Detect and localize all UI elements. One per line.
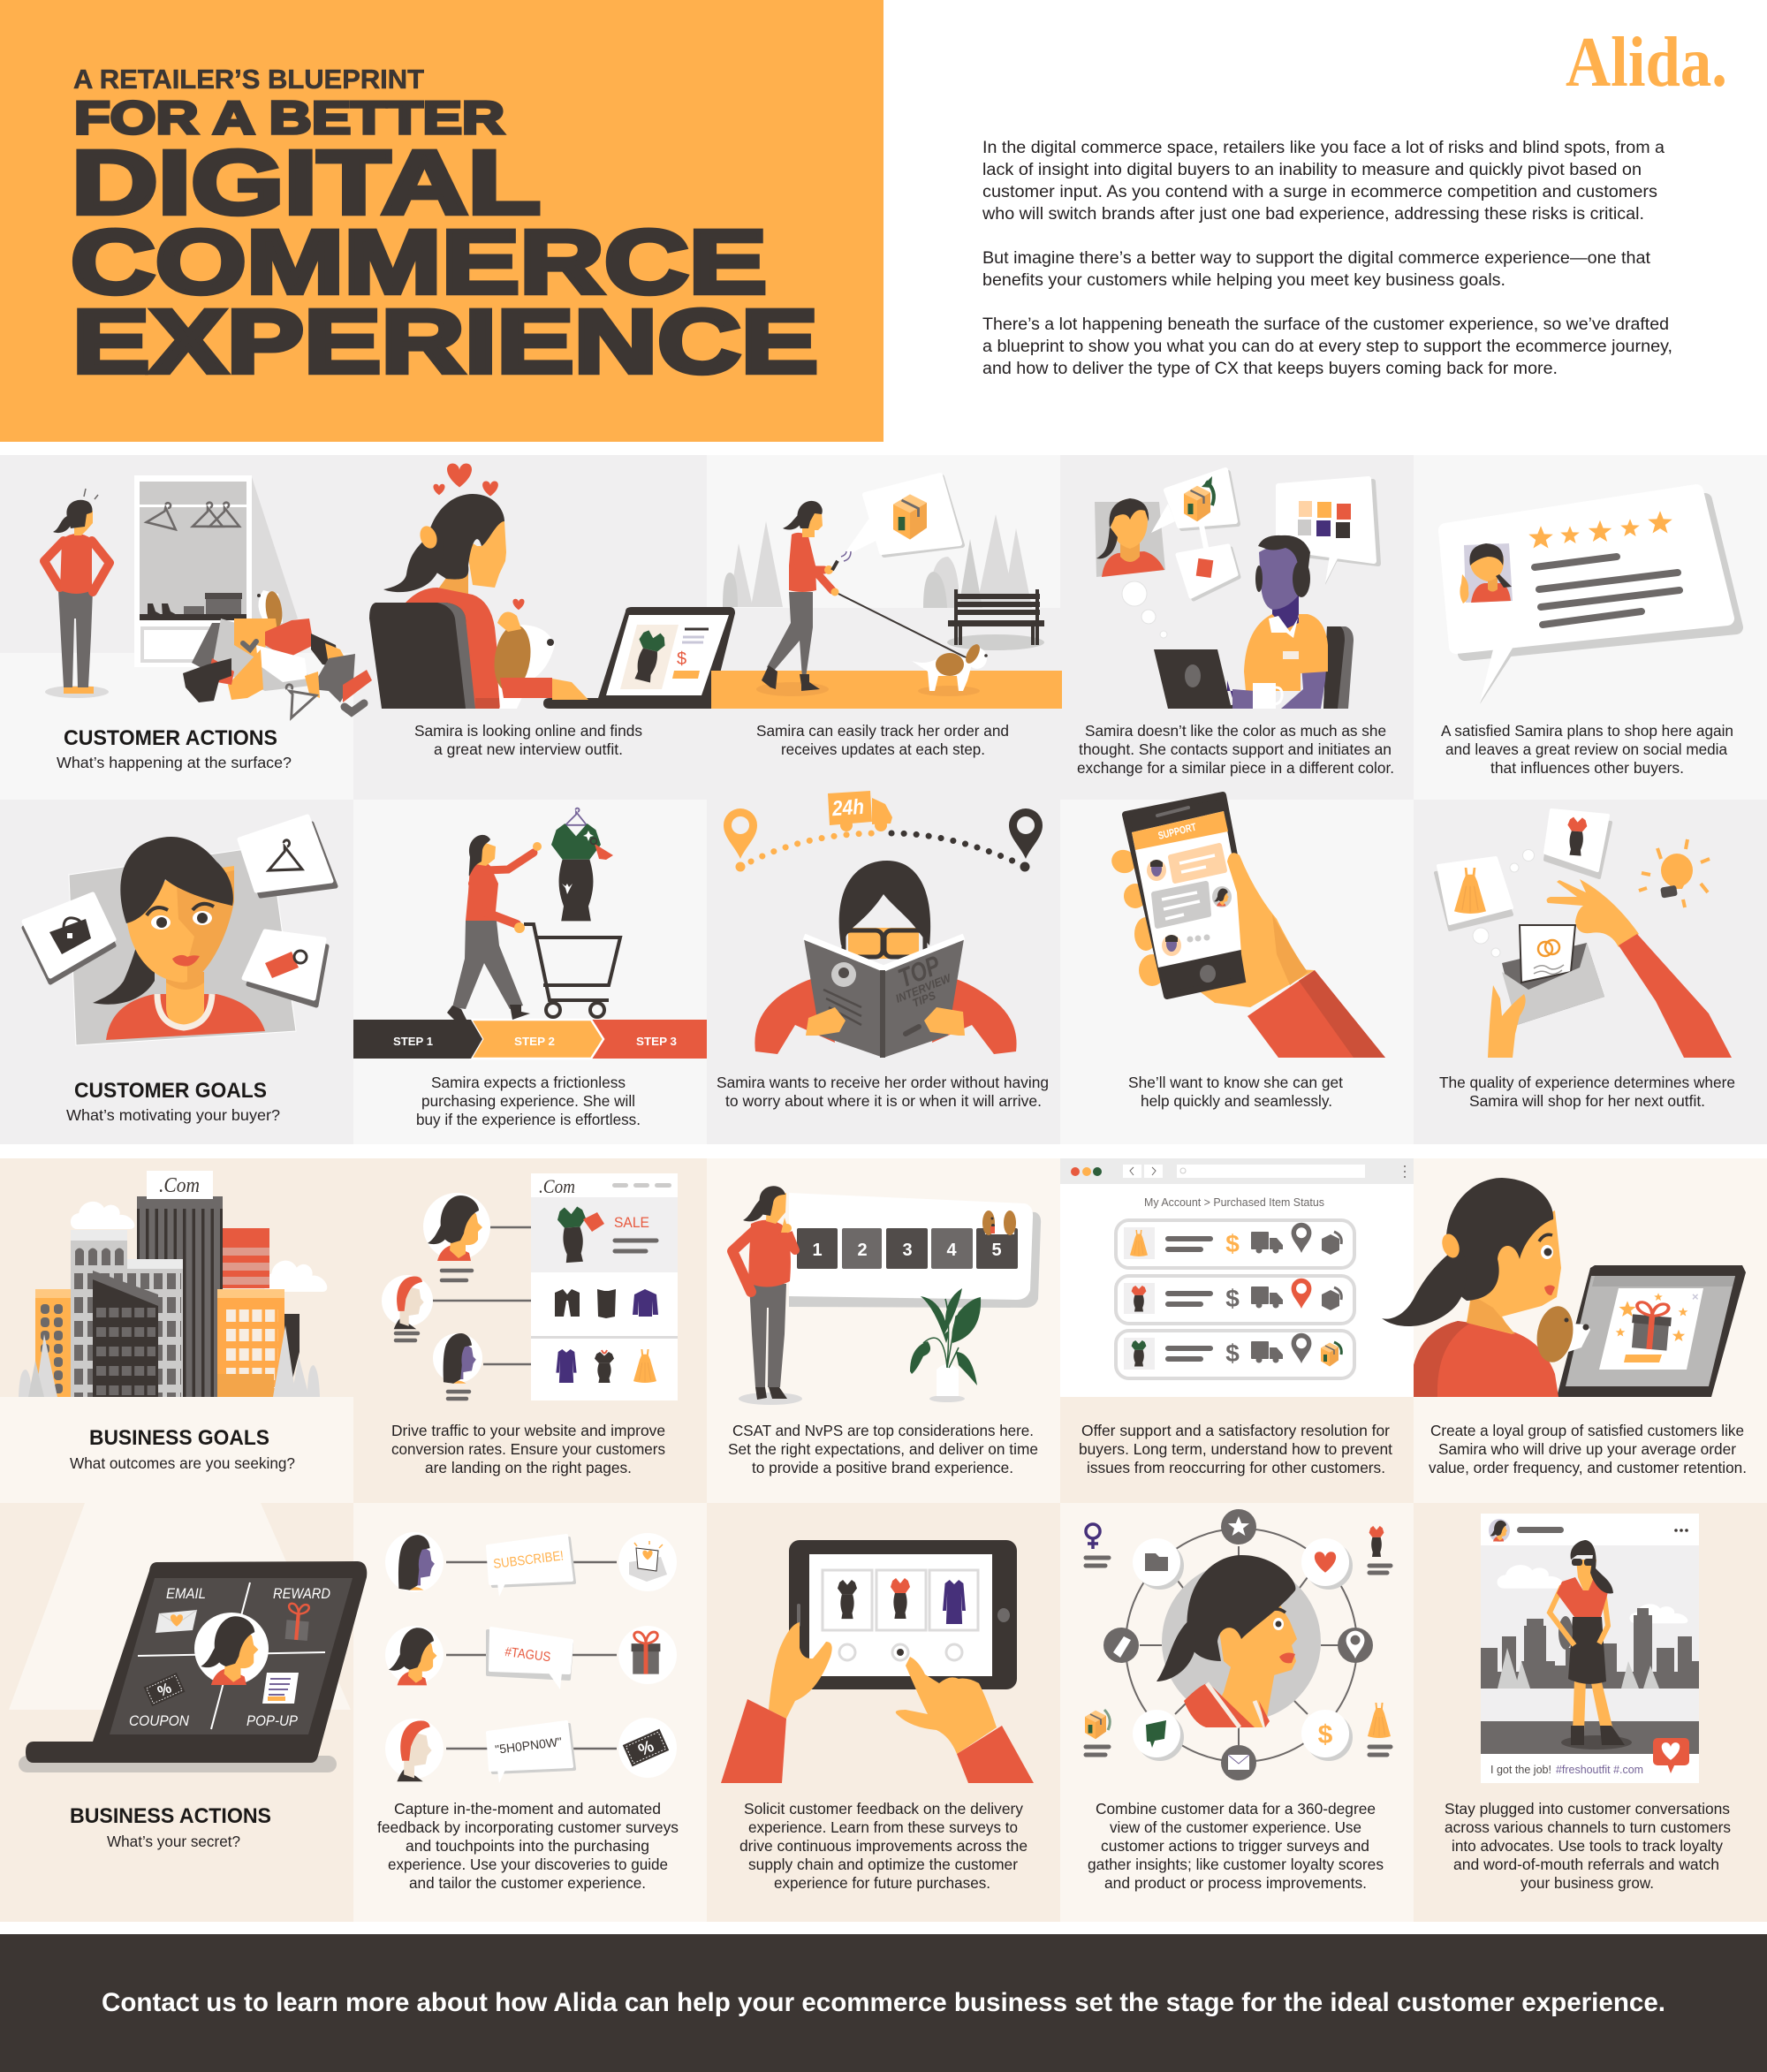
order row 3: [1116, 1331, 1354, 1378]
caption 2: [756, 722, 1009, 758]
row: promo code: "5H0PN0W": [494, 1734, 563, 1757]
caption 9: conversion rates. Ensure your customers: [391, 1440, 665, 1458]
caption 10: [728, 1422, 1038, 1476]
envelope and card: [1502, 925, 1604, 1025]
row: promo code: [385, 1718, 677, 1783]
illustration: city buildings: .Com: [159, 1174, 200, 1197]
heading: customer goals: [66, 1079, 280, 1124]
heading: business goals: BUSINESS GOALS: [89, 1426, 269, 1450]
caption 10: CSAT and NvPS are top considerations here.: [732, 1422, 1034, 1439]
central portrait: [1157, 1555, 1297, 1727]
ring icons: [1103, 1509, 1373, 1780]
light bulb: [1639, 839, 1710, 907]
heading: business goals: [70, 1426, 295, 1472]
order row 1: [1116, 1220, 1354, 1268]
heading: business actions: [70, 1804, 271, 1850]
logo: Alida: Alida.: [1566, 24, 1727, 102]
illustration: customers matched to website pages: [382, 1173, 678, 1400]
intro text: But imagine there’s a better way to support the digital commerce experience—one that: [982, 249, 1651, 268]
caption 14: experience. Learn from these surveys to: [748, 1818, 1018, 1836]
order row 3: $: [1225, 1340, 1240, 1367]
icon: pop-up: [262, 1673, 299, 1704]
illustration: tablet survey with hands: [721, 1540, 1034, 1783]
caption 6: [717, 1074, 1049, 1110]
caption 6: Samira wants to receive her order without having: [717, 1074, 1049, 1091]
heading: customer actions: [57, 726, 292, 771]
caption 13: and touchpoints into the purchasing: [406, 1837, 649, 1855]
center avatar: [194, 1613, 269, 1685]
post caption: #freshoutfit #.com: [1556, 1763, 1643, 1776]
shopping cart: [524, 924, 620, 1017]
caption 12: value, order frequency, and customer retention.: [1429, 1459, 1747, 1476]
caption 4: and leaves a great review on social media: [1445, 740, 1727, 758]
intro text: a blueprint to show you what you can do at every step to support the ecommerce journey,: [982, 338, 1672, 356]
footer call to action: Contact us to learn more about how Alida can help your ecommerce business set the stage for the ideal customer experience.: [102, 1988, 1665, 2017]
caption 5: Samira expects a frictionless: [431, 1074, 626, 1091]
intro text: who will switch brands after just one bad experience, addressing these risks is critical.: [982, 205, 1644, 224]
photo of Samira: [1095, 498, 1165, 577]
caption 3: thought. She contacts support and initiates an: [1079, 740, 1392, 758]
laptop with gift popup: ×: [1692, 1290, 1699, 1303]
caption 15: and product or process improvements.: [1104, 1874, 1367, 1892]
ring icons: $: [1318, 1720, 1333, 1749]
caption 15: view of the customer experience. Use: [1110, 1818, 1361, 1836]
bubble: package swap: [1151, 470, 1238, 533]
delivery truck 24h: [828, 791, 892, 831]
caption 3: Samira doesn’t like the color as much as she: [1085, 722, 1386, 740]
caption 8: Samira will shop for her next outfit.: [1469, 1092, 1705, 1110]
caption 8: The quality of experience determines where: [1439, 1074, 1735, 1091]
caption 12: Create a loyal group of satisfied customers like: [1430, 1422, 1744, 1439]
card: briefcase: [24, 894, 114, 983]
card: price tag: [244, 931, 327, 1006]
caption 3: exchange for a similar piece in a different color.: [1077, 759, 1394, 777]
caption 13: [377, 1800, 679, 1892]
caption 12: Samira who will drive up your average order: [1438, 1440, 1736, 1458]
support agent: [1154, 535, 1354, 709]
title text: A RETAILER’S BLUEPRINT: [73, 64, 424, 95]
website page: SALE: [614, 1214, 649, 1231]
caption 13: feedback by incorporating customer surveys: [377, 1818, 679, 1836]
illustration: hand holding phone with support chat: [1108, 795, 1385, 1058]
heading: customer actions: CUSTOMER ACTIONS: [64, 726, 277, 750]
caption 15: [1088, 1800, 1384, 1892]
illustration: Samira portrait with goal cards: [24, 816, 336, 1045]
phone: SUPPORT: [1157, 821, 1198, 842]
heading: business goals: What outcomes are you seeking?: [70, 1454, 295, 1472]
score card: 4: [946, 1241, 957, 1260]
caption 1: a great new interview outfit.: [434, 740, 623, 758]
title panel: [0, 0, 884, 442]
customer ovals: [382, 1193, 490, 1399]
illustration: order status browser window: [1060, 1158, 1414, 1378]
caption 8: [1439, 1074, 1735, 1110]
caption 7: She’ll want to know she can get: [1128, 1074, 1343, 1091]
rating stars: [1528, 511, 1672, 548]
laptop labels: REWARD: [273, 1585, 330, 1602]
step arrows: STEP 1: [393, 1035, 433, 1048]
open book: [804, 937, 964, 1058]
caption 11: Offer support and a satisfactory resolution for: [1081, 1422, 1390, 1439]
post header: [1489, 1519, 1688, 1542]
caption 15: customer actions to trigger surveys and: [1101, 1837, 1369, 1855]
icon: coupon: [144, 1673, 185, 1706]
title text: COMMERCE: [71, 212, 767, 313]
illustration: social media post: [1481, 1514, 1699, 1783]
score card: 5: [991, 1241, 1002, 1260]
caption 5: purchasing experience. She will: [421, 1092, 635, 1110]
caption 5: buy if the experience is effortless.: [416, 1111, 641, 1128]
like icon: [1653, 1738, 1689, 1773]
post caption: I got the job!: [1490, 1763, 1551, 1776]
caption 10: Set the right expectations, and deliver on time: [728, 1440, 1038, 1458]
bubble: red swatch: [1178, 546, 1239, 599]
caption 4: A satisfied Samira plans to shop here again: [1441, 722, 1733, 740]
intro text: [982, 139, 1672, 378]
illustration: closet and clothes pile: [134, 475, 372, 717]
illustration: order status browser window: My Account > Purchased Item Status: [1144, 1195, 1324, 1209]
icon: reward gift: [284, 1603, 312, 1641]
laptop with gift popup: [1557, 1265, 1746, 1397]
caption 7: [1128, 1074, 1343, 1110]
title text: DIGITAL: [72, 133, 541, 233]
score card: 3: [902, 1241, 913, 1260]
illustration: CSAT score card with woman: [732, 1186, 1041, 1405]
illustration: woman from behind: [44, 489, 110, 698]
illustration: 360-degree customer view: [1085, 1509, 1391, 1780]
caption 9: Drive traffic to your website and improve: [391, 1422, 665, 1439]
laptop with dress page: [543, 607, 735, 709]
caption 14: [739, 1800, 1028, 1892]
caption 12: [1429, 1422, 1747, 1476]
illustration: Samira contacting support agent: [1095, 470, 1378, 709]
dog: [912, 642, 988, 691]
caption 1: Samira is looking online and finds: [414, 722, 642, 740]
illustration: woman with shopping cart and dress: [353, 808, 707, 1059]
order row 2: $: [1225, 1285, 1240, 1312]
intro text: benefits your customers while helping you meet key business goals.: [982, 271, 1505, 290]
caption 15: Combine customer data for a 360-degree: [1096, 1800, 1376, 1818]
footer call to action: [0, 1934, 1767, 2072]
post caption: [1490, 1763, 1643, 1776]
order row 2: [1116, 1276, 1354, 1324]
row: hashtag: [385, 1626, 677, 1689]
website page: [531, 1173, 678, 1400]
laptop with dress page: $: [677, 649, 686, 669]
website page: .Com: [539, 1175, 575, 1197]
open book: TOP: [894, 951, 945, 993]
score card: 1: [812, 1241, 823, 1260]
speech bubble with package: [841, 475, 962, 558]
woman in sunglasses: [1550, 1540, 1625, 1745]
caption 16: your business grow.: [1521, 1874, 1654, 1892]
title text: FOR A BETTER: [74, 93, 504, 144]
phone: [1126, 795, 1257, 996]
caption 10: to provide a positive brand experience.: [752, 1459, 1013, 1476]
caption 13: and tailor the customer experience.: [409, 1874, 646, 1892]
dog in arms: [1533, 1303, 1590, 1365]
dress on hanger: [551, 808, 613, 921]
laptop labels: POP-UP: [246, 1712, 299, 1729]
caption 16: Stay plugged into customer conversations: [1445, 1800, 1730, 1818]
illustration: Samira browsing on laptop: [369, 463, 735, 709]
shopper woman: [447, 835, 542, 1020]
order row 1: $: [1225, 1230, 1240, 1257]
caption 15: gather insights; like customer loyalty scores: [1088, 1856, 1384, 1873]
caption 9: [391, 1422, 665, 1476]
title text: EXPERIENCE: [72, 292, 818, 392]
caption 16: into advocates. Use tools to track loyalty: [1452, 1837, 1723, 1855]
intro text: lack of insight into digital buyers to an inability to measure and quickly pivot based on: [982, 161, 1642, 179]
intro text: In the digital commerce space, retailers like you face a lot of risks and blind spots, from a: [982, 139, 1665, 157]
intro text: customer input. As you contend with a surge in ecommerce competition and customers: [982, 183, 1657, 201]
caption 16: across various channels to turn customers: [1445, 1818, 1731, 1836]
caption 14: supply chain and optimize the customer: [748, 1856, 1018, 1873]
intro text: and how to deliver the type of CX that keeps buyers coming back for more.: [982, 360, 1558, 378]
heading: customer actions: What’s happening at the surface?: [57, 754, 292, 771]
intro text: There’s a lot happening beneath the surface of the customer experience, so we’ve drafted: [982, 315, 1669, 334]
step arrows: [353, 1020, 707, 1059]
step arrows: STEP 3: [636, 1035, 677, 1048]
caption 9: are landing on the right pages.: [425, 1459, 632, 1476]
caption 13: Capture in-the-moment and automated: [394, 1800, 661, 1818]
potted plant: [910, 1288, 981, 1402]
reviewer photo: [1460, 543, 1513, 603]
card: hanger: [239, 816, 336, 896]
score card: 2: [857, 1241, 868, 1260]
illustration: review speech bubble: [1445, 491, 1736, 704]
open book: TIPS: [911, 989, 937, 1010]
open book: INTERVIEW: [894, 971, 954, 1006]
laptop labels: [129, 1585, 330, 1729]
caption 5: [416, 1074, 641, 1128]
score card: [789, 1193, 1041, 1308]
outer data icons: [1085, 1524, 1391, 1755]
caption 4: [1441, 722, 1733, 777]
woman thinking: [732, 1186, 802, 1405]
dog peeking: [982, 1207, 1016, 1235]
heading: customer goals: What’s motivating your buyer?: [66, 1106, 280, 1124]
bench: [947, 589, 1044, 650]
caption 14: drive continuous improvements across the: [739, 1837, 1028, 1855]
icon: email: [155, 1610, 197, 1633]
caption 16: [1445, 1800, 1731, 1892]
caption 11: issues from reoccurring for other customers.: [1087, 1459, 1385, 1476]
caption 16: and word-of-mouth referrals and watch: [1453, 1856, 1719, 1873]
skyline: [1481, 1608, 1699, 1689]
illustration: marketing laptop: [19, 1561, 367, 1772]
tablet: [789, 1540, 1017, 1689]
bubble: colour swatches: [1278, 479, 1378, 585]
delivery route: [724, 791, 1043, 871]
caption 14: Solicit customer feedback on the delivery: [744, 1800, 1023, 1818]
title text: [71, 64, 818, 392]
illustration: Samira receiving loyalty reward: [1382, 1178, 1746, 1397]
illustration: feedback channels: [385, 1532, 677, 1783]
delivery truck 24h: 24h: [830, 795, 865, 821]
caption 3: [1077, 722, 1394, 777]
step arrows: STEP 2: [514, 1035, 555, 1048]
walking woman: [762, 501, 976, 691]
heading: business actions: BUSINESS ACTIONS: [70, 1804, 271, 1828]
heading: business actions: What’s your secret?: [107, 1833, 240, 1850]
dress card: orange: [1436, 858, 1512, 930]
caption 1: [414, 722, 642, 758]
row: hashtag: #TAGUS: [504, 1644, 551, 1665]
caption 11: buyers. Long term, understand how to prevent: [1079, 1440, 1392, 1458]
typing hand: [552, 679, 588, 700]
caption 2: Samira can easily track her order and: [756, 722, 1009, 740]
caption 11: [1079, 1422, 1392, 1476]
caption 14: experience for future purchases.: [774, 1874, 990, 1892]
caption 7: help quickly and seamlessly.: [1141, 1092, 1332, 1110]
heading: customer goals: CUSTOMER GOALS: [74, 1079, 267, 1103]
dress card: black and red: [1545, 810, 1611, 877]
row: subscribe: [385, 1532, 677, 1597]
caption 4: that influences other buyers.: [1490, 759, 1684, 777]
laptop labels: COUPON: [129, 1712, 190, 1729]
caption 13: experience. Use your discoveries to guide: [388, 1856, 668, 1873]
illustration: reading book with delivery route: [724, 791, 1043, 1058]
illustration: Samira walking the dog and tracking order: [711, 475, 1062, 709]
caption 2: receives updates at each step.: [781, 740, 985, 758]
row: subscribe: SUBSCRIBE!: [492, 1548, 565, 1572]
illustration: city buildings: [19, 1171, 327, 1397]
illustration: hands opening invitation: [1436, 810, 1732, 1058]
caption 6: to worry about where it is or when it will arrive.: [725, 1092, 1042, 1110]
laptop labels: EMAIL: [166, 1585, 206, 1602]
